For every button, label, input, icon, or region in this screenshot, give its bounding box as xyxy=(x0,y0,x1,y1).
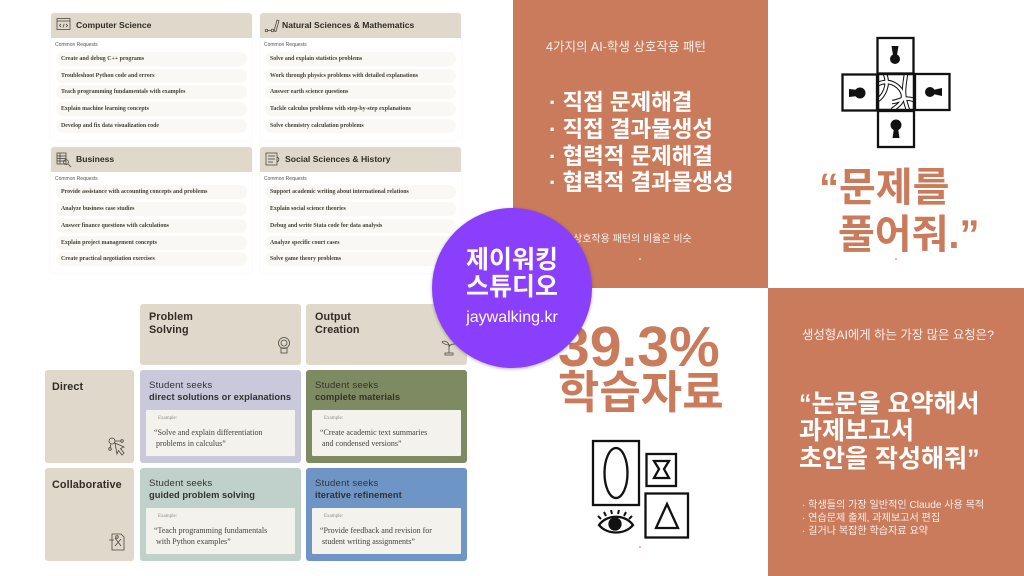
usage notes: · 길거나 복잡한 학습자료 요약 xyxy=(802,526,928,537)
icon: problem solving xyxy=(278,337,290,354)
heading: business: Business xyxy=(76,154,114,164)
heading: social sciences xyxy=(260,147,461,172)
panel: computer science requests: Create and debug C++ programs xyxy=(61,56,144,62)
panel: social sciences requests xyxy=(260,147,461,273)
example box: Example: xyxy=(324,514,343,519)
panel: social sciences requests: Debug and write Stata code for data analysis xyxy=(270,223,382,229)
statistic: 39.3% learning material xyxy=(558,315,724,418)
panel: business requests: Common Requests xyxy=(55,176,98,182)
example box: problems in calculus” xyxy=(156,439,226,448)
panel: social sciences requests: Analyze specific court cases xyxy=(270,240,340,246)
example box: and condensed versions” xyxy=(322,439,402,448)
quote: solve the problem: 풀어줘.” xyxy=(838,213,980,257)
panel: computer science requests: Common Requests xyxy=(55,42,98,48)
heading: natural sciences xyxy=(260,13,461,38)
panel: business requests: Answer finance questions with calculations xyxy=(61,223,169,229)
panel: business requests: Create practical negotiation exercises xyxy=(61,256,155,262)
badge title: 스튜디오 xyxy=(466,273,558,301)
pattern list: · 협력적 문제해결 xyxy=(549,144,713,169)
quote: summarize paper: 과제보고서 xyxy=(799,417,914,445)
example box: student writing assignments” xyxy=(322,537,415,546)
quote: summarize paper xyxy=(799,390,979,472)
cell: collaborative output creation: iterative refinement xyxy=(315,490,402,500)
icon: keyhole cross xyxy=(841,36,951,148)
panel: natural sciences requests xyxy=(260,13,461,140)
panel heading: 생성형AI에게 하는 가장 많은 요청은? xyxy=(802,328,994,342)
panel: computer science requests: Develop and fix data visualization code xyxy=(61,123,159,129)
row header: direct xyxy=(45,370,134,463)
panel: business requests: Analyze business case studies xyxy=(61,206,134,212)
heading: business xyxy=(51,147,252,172)
column header: output creation: Creation xyxy=(315,324,360,336)
icon: seedling xyxy=(442,340,455,356)
panel: computer science requests: Explain machine learning concepts xyxy=(61,106,149,112)
example box xyxy=(146,410,295,456)
panel: four interaction patterns xyxy=(513,0,768,288)
example box xyxy=(312,508,461,554)
panel: computer science requests: Teach programming fundamentals with examples xyxy=(61,89,185,95)
example box: Example: xyxy=(324,416,343,421)
statistic: 39.3% learning material: 39.3% xyxy=(558,315,720,379)
panel: most common request xyxy=(768,288,1024,576)
small dot xyxy=(639,258,641,260)
pattern ratio note: 상호작용 패턴의 비율은 비슷 xyxy=(573,234,692,245)
example box: Example: xyxy=(158,416,177,421)
panel heading: 4가지의 AI-학생 상호작용 패턴 xyxy=(546,40,706,54)
example box: “Teach programming fundamentals xyxy=(154,526,267,535)
column header: output creation: Output xyxy=(315,311,351,323)
badge: jaywalking studio xyxy=(432,208,592,368)
column header: problem solving: Problem xyxy=(149,311,193,323)
panel: business requests: Provide assistance with accounting concepts and problems xyxy=(61,189,207,195)
column header: problem solving xyxy=(140,304,301,365)
pattern list: · 협력적 결과물생성 xyxy=(549,170,734,195)
row header: direct: Direct xyxy=(52,380,83,392)
pattern list xyxy=(549,90,734,195)
cell: direct output creation: Student seeks xyxy=(315,380,378,391)
cell: collaborative output creation: Student seeks xyxy=(315,478,378,489)
panel: business requests: Explain project management concepts xyxy=(61,240,157,246)
panel: natural sciences requests: Solve and explain statistics problems xyxy=(270,56,362,62)
panel: social sciences requests: Explain social science theories xyxy=(270,206,346,212)
statistic: 39.3% learning material: 학습자료 xyxy=(558,367,724,418)
usage notes: · 학생들의 가장 일반적인 Claude 사용 목적 xyxy=(802,500,984,510)
panel: computer science requests: Troubleshoot Python code and errors xyxy=(61,73,155,79)
cell: collaborative problem solving: guided problem solving xyxy=(149,490,255,500)
heading: computer science xyxy=(51,13,252,38)
heading: computer science: Computer Science xyxy=(76,20,151,30)
quote: summarize paper: 초안을 작성해줘” xyxy=(799,444,979,472)
badge title xyxy=(466,246,558,301)
pattern list: · 직접 결과물생성 xyxy=(549,117,713,142)
quote: solve the problem: “문제를 xyxy=(819,166,949,210)
cell: direct problem solving xyxy=(140,370,301,463)
usage notes xyxy=(802,499,984,537)
example box: with Python examples” xyxy=(156,537,231,546)
panel: business requests xyxy=(51,147,252,273)
row header: collaborative: Collaborative xyxy=(52,478,122,490)
example box: “Provide feedback and revision for xyxy=(320,526,432,535)
example box: “Create academic text summaries xyxy=(320,428,427,437)
quote: summarize paper: “논문을 요약해서 xyxy=(799,390,979,418)
quote: solve the problem xyxy=(819,166,980,257)
badge url: jaywalking.kr xyxy=(466,309,558,326)
cell: direct output creation: complete materials xyxy=(315,392,400,402)
cell: collaborative output creation xyxy=(306,468,467,561)
column header: output creation xyxy=(306,304,467,365)
example box xyxy=(146,508,295,554)
panel: natural sciences requests: Work through physics problems with detailed explanations xyxy=(270,73,418,79)
icon: document xyxy=(109,534,124,550)
cell: direct problem solving: Student seeks xyxy=(149,380,212,391)
panel: natural sciences requests: Common Requests xyxy=(264,42,307,48)
cell: direct problem solving: direct solutions or explanations xyxy=(149,392,291,402)
example box: Example: xyxy=(158,514,177,519)
panel: social sciences requests: Support academic writing about international relations xyxy=(270,189,409,195)
small dot xyxy=(895,258,897,260)
cell: collaborative problem solving xyxy=(140,468,301,561)
pattern list: · 직접 문제해결 xyxy=(549,90,692,115)
cell: collaborative problem solving: Student seeks xyxy=(149,478,212,489)
panel: natural sciences requests: Answer earth science questions xyxy=(270,89,348,95)
icon: cursor xyxy=(108,438,125,456)
cell: direct output creation xyxy=(306,370,467,463)
example box: “Solve and explain differentiation xyxy=(154,428,262,437)
example box xyxy=(312,410,461,456)
panel: computer science requests xyxy=(51,13,252,140)
usage notes: · 연습문제 출제, 과제보고서 편집 xyxy=(802,513,940,524)
badge title: 제이워킹 xyxy=(466,246,558,274)
heading: social sciences: Social Sciences & History xyxy=(285,154,391,164)
column header: problem solving: Solving xyxy=(149,324,189,336)
panel: natural sciences requests: Tackle calculus problems with step-by-step explanations xyxy=(270,106,411,112)
icon: framed shapes and eye xyxy=(592,440,690,539)
heading: natural sciences: Natural Sciences & Mathematics xyxy=(282,20,414,30)
small dot xyxy=(639,546,641,548)
panel: natural sciences requests: Solve chemistry calculation problems xyxy=(270,123,364,129)
panel: social sciences requests: Common Requests xyxy=(264,176,307,182)
panel: social sciences requests: Solve game theory problems xyxy=(270,256,341,262)
row header: collaborative xyxy=(45,468,134,561)
